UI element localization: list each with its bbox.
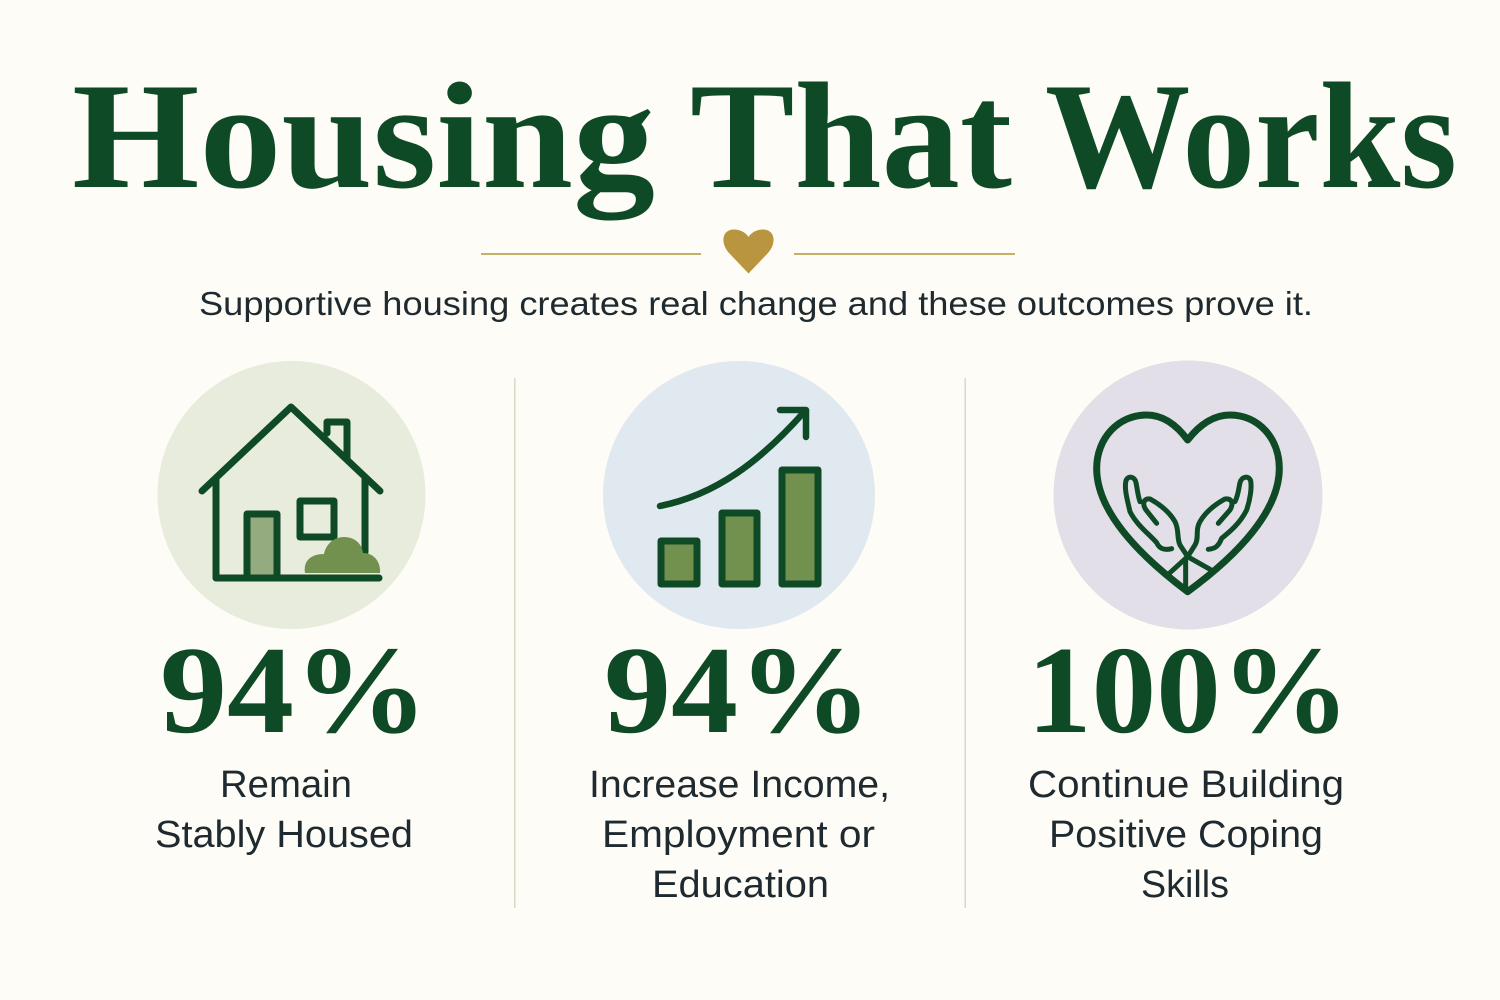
label: remain stably housed	[155, 764, 413, 856]
title: Works	[1045, 52, 1457, 220]
panel: income	[589, 361, 890, 906]
label: remain stably housed: Stably Housed	[155, 814, 413, 856]
icon: house	[158, 361, 426, 629]
label: continue building positive coping skills	[1028, 764, 1344, 906]
column dividers	[514, 378, 966, 908]
title	[72, 52, 1457, 221]
label: continue building positive coping skills: Continue Building	[1028, 764, 1344, 806]
title: Housing	[72, 52, 655, 221]
label: continue building positive coping skills: Positive Coping	[1049, 814, 1323, 856]
panel: stably housed	[155, 361, 428, 856]
label: increase income, employment or education: Education	[652, 864, 829, 906]
ornament: lines and gold heart	[481, 230, 1015, 274]
label: remain stably housed: Remain	[220, 764, 352, 806]
stat: 94% income: 94%	[604, 622, 872, 760]
label: increase income, employment or education	[589, 764, 890, 906]
icon: heart with hands	[1054, 360, 1322, 630]
subtitle: Supportive housing creates real change and these outcomes prove it.	[199, 285, 1313, 322]
label: increase income, employment or education: Increase Income,	[589, 764, 890, 806]
title: That	[690, 52, 1012, 220]
icon: rising bar chart	[603, 361, 875, 629]
panel: coping skills	[1027, 360, 1350, 906]
stat: 94% stably housed: 94%	[160, 622, 428, 760]
label: increase income, employment or education: Employment or	[602, 814, 875, 856]
stat: 100%: 100%	[1027, 622, 1350, 760]
label: continue building positive coping skills: Skills	[1141, 864, 1229, 906]
